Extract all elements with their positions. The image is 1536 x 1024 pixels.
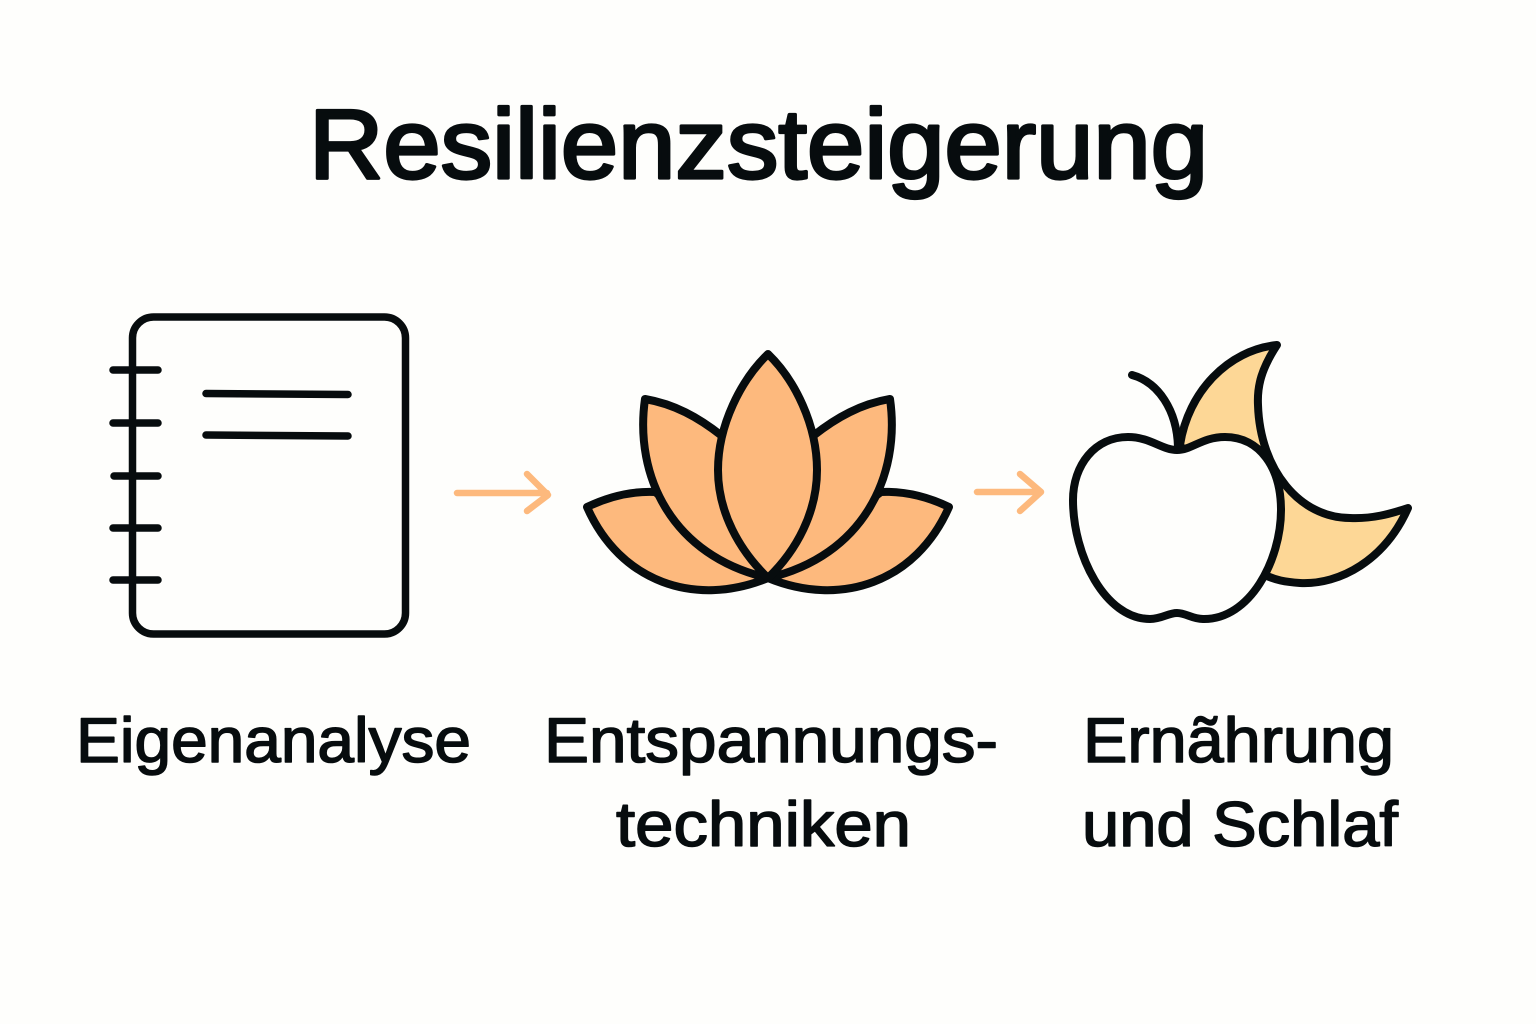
arrow: lotus to apple bbox=[977, 474, 1041, 511]
label: Ernährung und Schlaf: Ernãhrung bbox=[1083, 706, 1394, 776]
title: Resilienzsteigerung bbox=[309, 89, 1208, 199]
icon: crescent moon bbox=[1180, 345, 1408, 583]
label: Ernährung und Schlaf bbox=[1082, 706, 1399, 860]
icon: lotus bbox=[587, 354, 949, 590]
icon: apple and moon bbox=[1073, 345, 1408, 619]
label: Entspannungstechniken bbox=[544, 706, 998, 860]
arrow: notebook to lotus bbox=[457, 474, 548, 511]
label: Eigenanalyse: Eigenanalyse bbox=[76, 706, 471, 776]
icon: notebook bbox=[113, 317, 406, 634]
icon: apple stem bbox=[1132, 375, 1178, 447]
label: Ernährung und Schlaf: und Schlaf bbox=[1082, 790, 1399, 860]
label: Entspannungstechniken: Entspannungs- bbox=[544, 706, 998, 776]
icon: apple bbox=[1073, 437, 1281, 619]
label: Entspannungstechniken: techniken bbox=[616, 790, 911, 860]
